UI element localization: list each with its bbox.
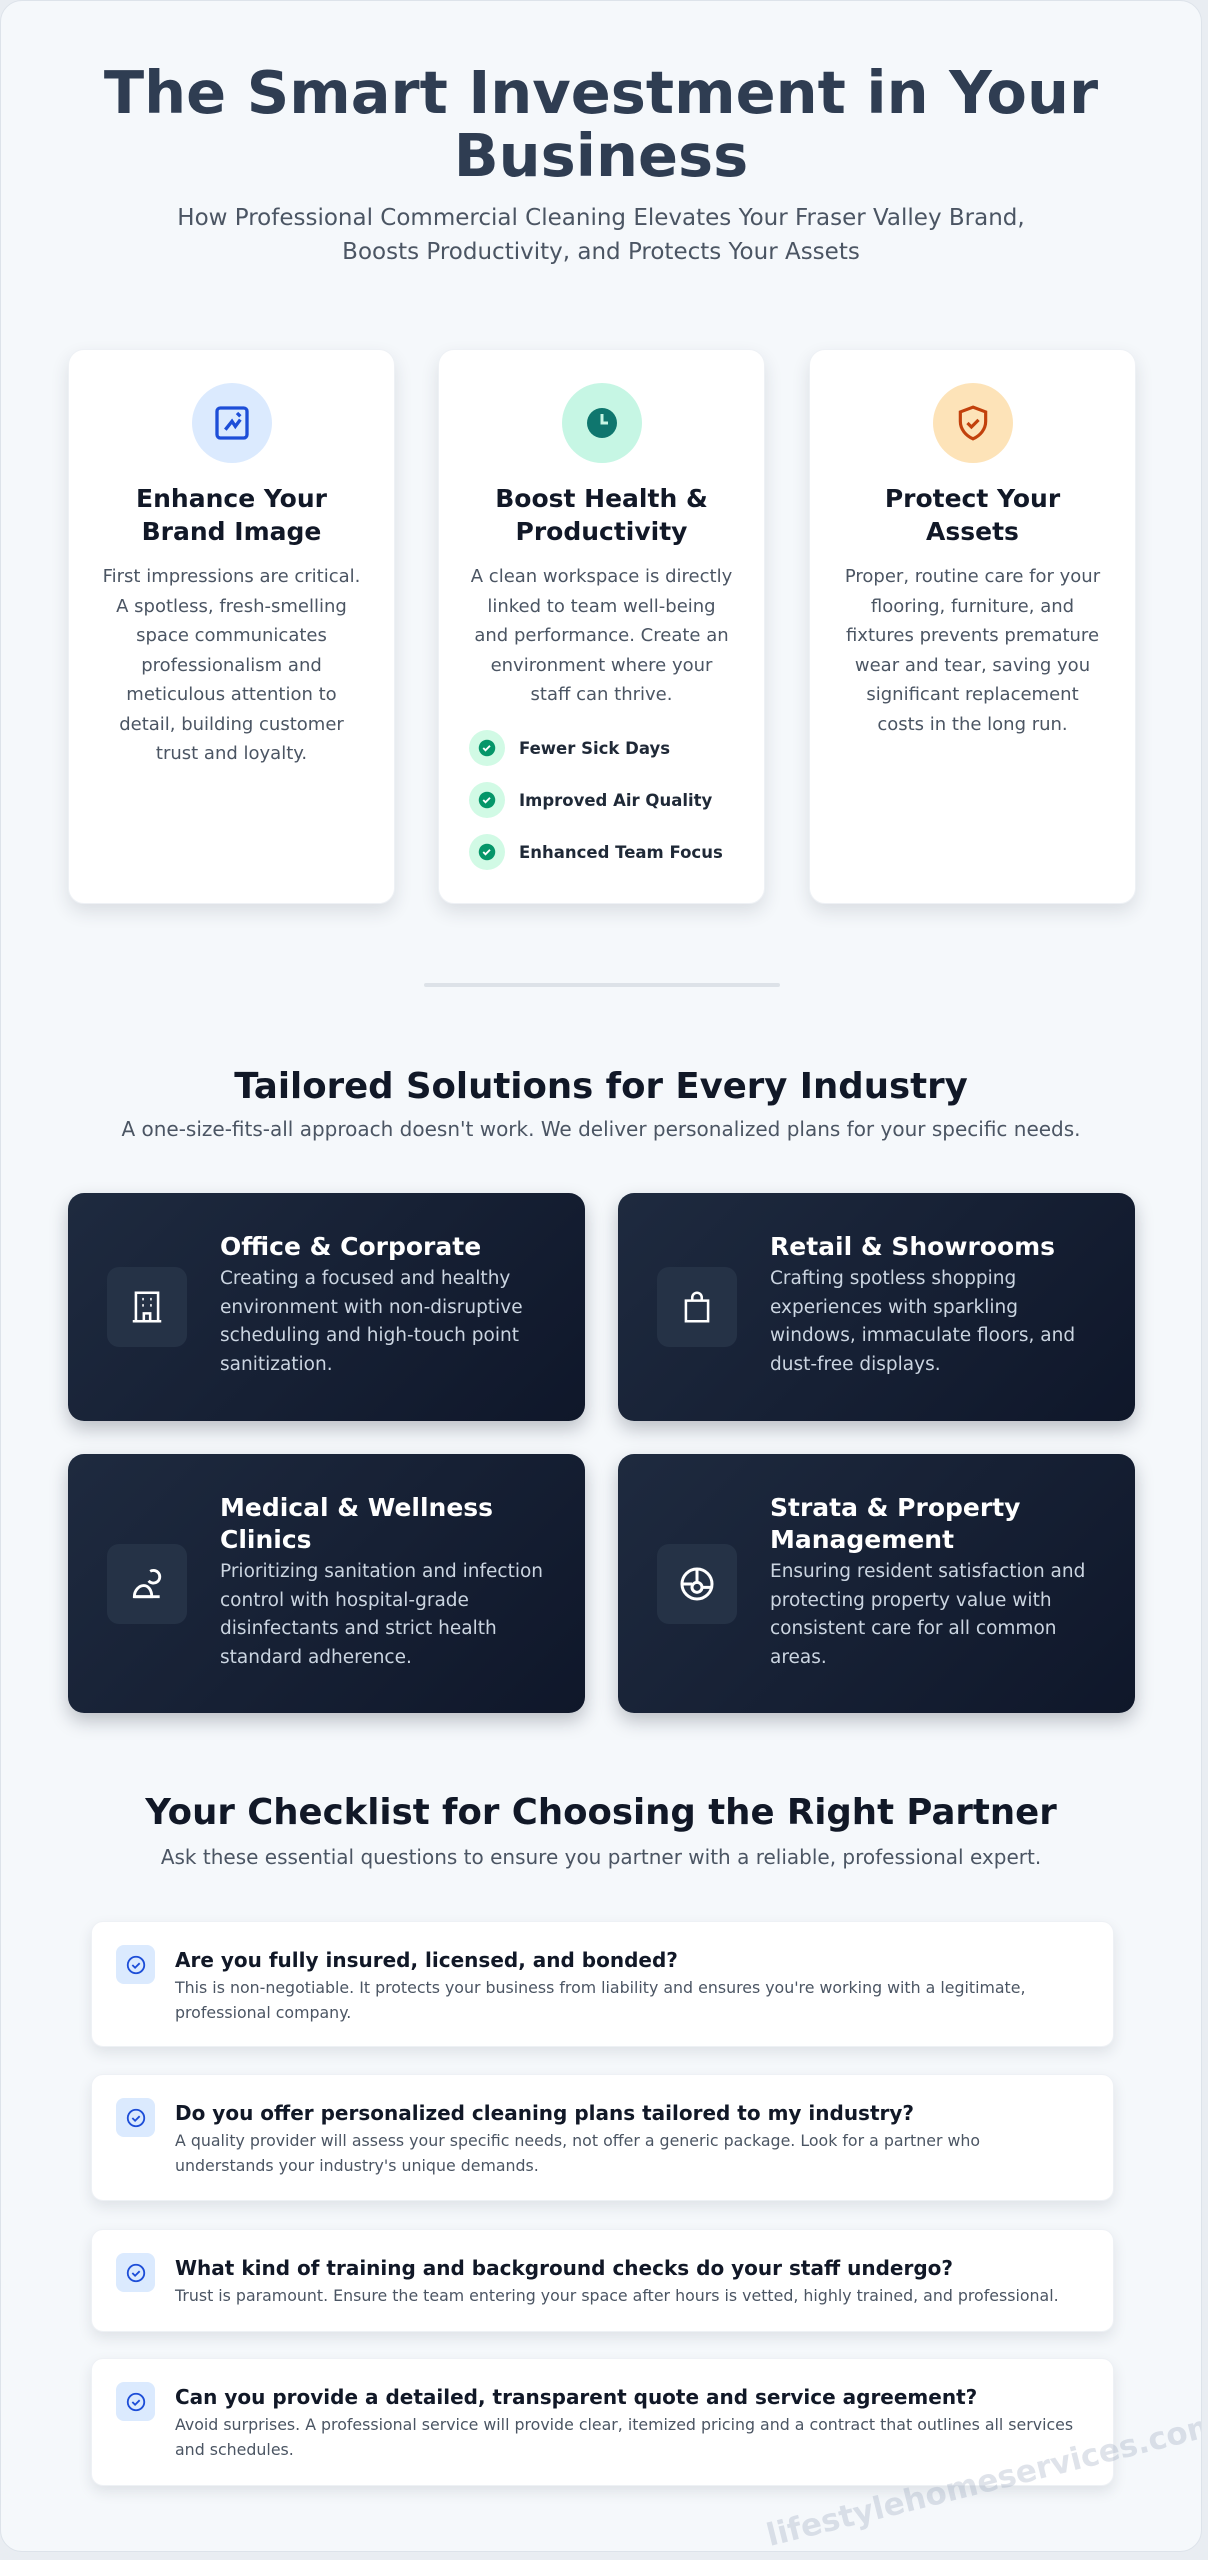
panel: health: linked to team well-being xyxy=(487,596,716,616)
panel: office: Creating a focused and healthy environment with non-disruptive scheduling and high-touch point sanitization. xyxy=(220,1268,523,1374)
panel: assets xyxy=(809,349,1136,904)
question 4 xyxy=(91,2358,1114,2486)
panel: office: Office & Corporate xyxy=(220,1232,481,1261)
benefit list: Improved Air Quality xyxy=(519,790,712,810)
panel: assets: significant replacement xyxy=(866,684,1079,705)
icon: building xyxy=(107,1267,187,1347)
panel: brand image xyxy=(68,349,395,904)
panel: office xyxy=(68,1193,585,1421)
panel: health: staff can thrive. xyxy=(531,684,672,705)
panel: brand image: Enhance Your xyxy=(136,484,327,513)
panel: assets: costs in the long run. xyxy=(877,714,1068,734)
icon: target xyxy=(657,1544,737,1624)
icon: person xyxy=(107,1544,187,1624)
panel: retail: Retail & Showrooms xyxy=(770,1232,1055,1261)
panel: medical: Prioritizing sanitation and infection control with hospital-grade disinfectants and strict health standard adherence. xyxy=(220,1561,543,1668)
panel: assets: wear and tear, saving you xyxy=(855,654,1090,676)
panel: retail: Crafting spotless shopping experiences with sparkling windows, immaculate floors, and dust-free displays. xyxy=(770,1268,1075,1374)
heading: tailored solutions: Tailored Solutions for Every Industry xyxy=(234,1066,968,1107)
question 2: A quality provider will assess your specific needs, not offer a generic package. Look for a partner who xyxy=(175,2131,980,2150)
panel: brand image: Brand Image xyxy=(142,517,321,546)
question 1: professional company. xyxy=(175,2002,351,2022)
panel: assets: Assets xyxy=(926,517,1019,546)
question 2 xyxy=(91,2074,1114,2201)
question 2: Do you offer personalized cleaning plans tailored to my industry? xyxy=(175,2101,914,2125)
question 1: This is non-negotiable. It protects your business from liability and ensures you're working with a legitimate, xyxy=(175,1978,1025,1997)
panel: health: environment where your xyxy=(491,654,712,676)
benefit list xyxy=(469,730,723,870)
heading: checklist: Your Checklist for Choosing the Right Partner xyxy=(145,1792,1057,1833)
panel: brand image: A spotless, fresh-smelling xyxy=(116,596,347,616)
panel: assets: flooring, furniture, and xyxy=(871,596,1074,616)
icon: image xyxy=(192,383,272,463)
benefit list: Enhanced Team Focus xyxy=(519,842,723,862)
panel: health: Productivity xyxy=(516,517,687,546)
panel: assets: fixtures prevents premature xyxy=(846,625,1099,646)
question 4: and schedules. xyxy=(175,2440,294,2458)
panel: assets: Proper, routine care for your xyxy=(845,566,1100,587)
question 1 xyxy=(91,1921,1114,2047)
panel: medical: Medical & Wellness Clinics xyxy=(220,1493,493,1554)
icon: shield xyxy=(932,383,1012,463)
panel: brand image: trust and loyalty. xyxy=(156,743,307,764)
panel: health: A clean workspace is directly xyxy=(471,566,732,587)
question 3: Trust is paramount. Ensure the team entering your space after hours is vetted, highly trained, and professional. xyxy=(175,2286,1059,2305)
panel: retail xyxy=(618,1193,1135,1421)
subheading: Ask these essential questions to ensure you partner with a reliable, professional expert. xyxy=(161,1845,1041,1869)
panel: brand image: professionalism and xyxy=(141,654,322,676)
benefit list: Fewer Sick Days xyxy=(519,738,670,758)
question 3: What kind of training and background checks do your staff undergo? xyxy=(175,2256,953,2280)
icon: clock xyxy=(562,383,642,463)
panel: assets: Protect Your xyxy=(885,484,1060,513)
question 2: understands your industry's unique demands. xyxy=(175,2156,539,2174)
panel: health xyxy=(438,349,765,904)
subtitle: How Professional Commercial Cleaning Elevates Your Fraser Valley Brand, Boosts Productivity, and Protects Your Assets xyxy=(177,205,1025,265)
panel: brand image: meticulous attention to xyxy=(126,684,337,705)
panel: brand image: First impressions are critical. xyxy=(103,566,360,587)
question 3 xyxy=(91,2229,1114,2332)
panel: health: Boost Health & xyxy=(495,484,708,513)
panel: brand image: detail, building customer xyxy=(119,714,344,734)
panel: brand image: space communicates xyxy=(136,625,327,646)
panel: strata xyxy=(618,1454,1135,1713)
title: The Smart Investment in Your Business xyxy=(104,58,1098,190)
panel: strata: Strata & Property Management xyxy=(770,1493,1020,1554)
question 1: Are you fully insured, licensed, and bonded? xyxy=(175,1948,678,1972)
subheading: A one-size-fits-all approach doesn't work. We deliver personalized plans for your specific needs. xyxy=(121,1117,1081,1141)
question 4: Can you provide a detailed, transparent quote and service agreement? xyxy=(175,2385,977,2409)
icon: bag xyxy=(657,1267,737,1347)
question 4: Avoid surprises. A professional service will provide clear, itemized pricing and a contract that outlines all services xyxy=(175,2415,1073,2434)
panel: medical xyxy=(68,1454,585,1713)
panel: health: and performance. Create an xyxy=(474,625,729,646)
panel: strata: Ensuring resident satisfaction and protecting property value with consistent care for all common areas. xyxy=(770,1561,1085,1668)
